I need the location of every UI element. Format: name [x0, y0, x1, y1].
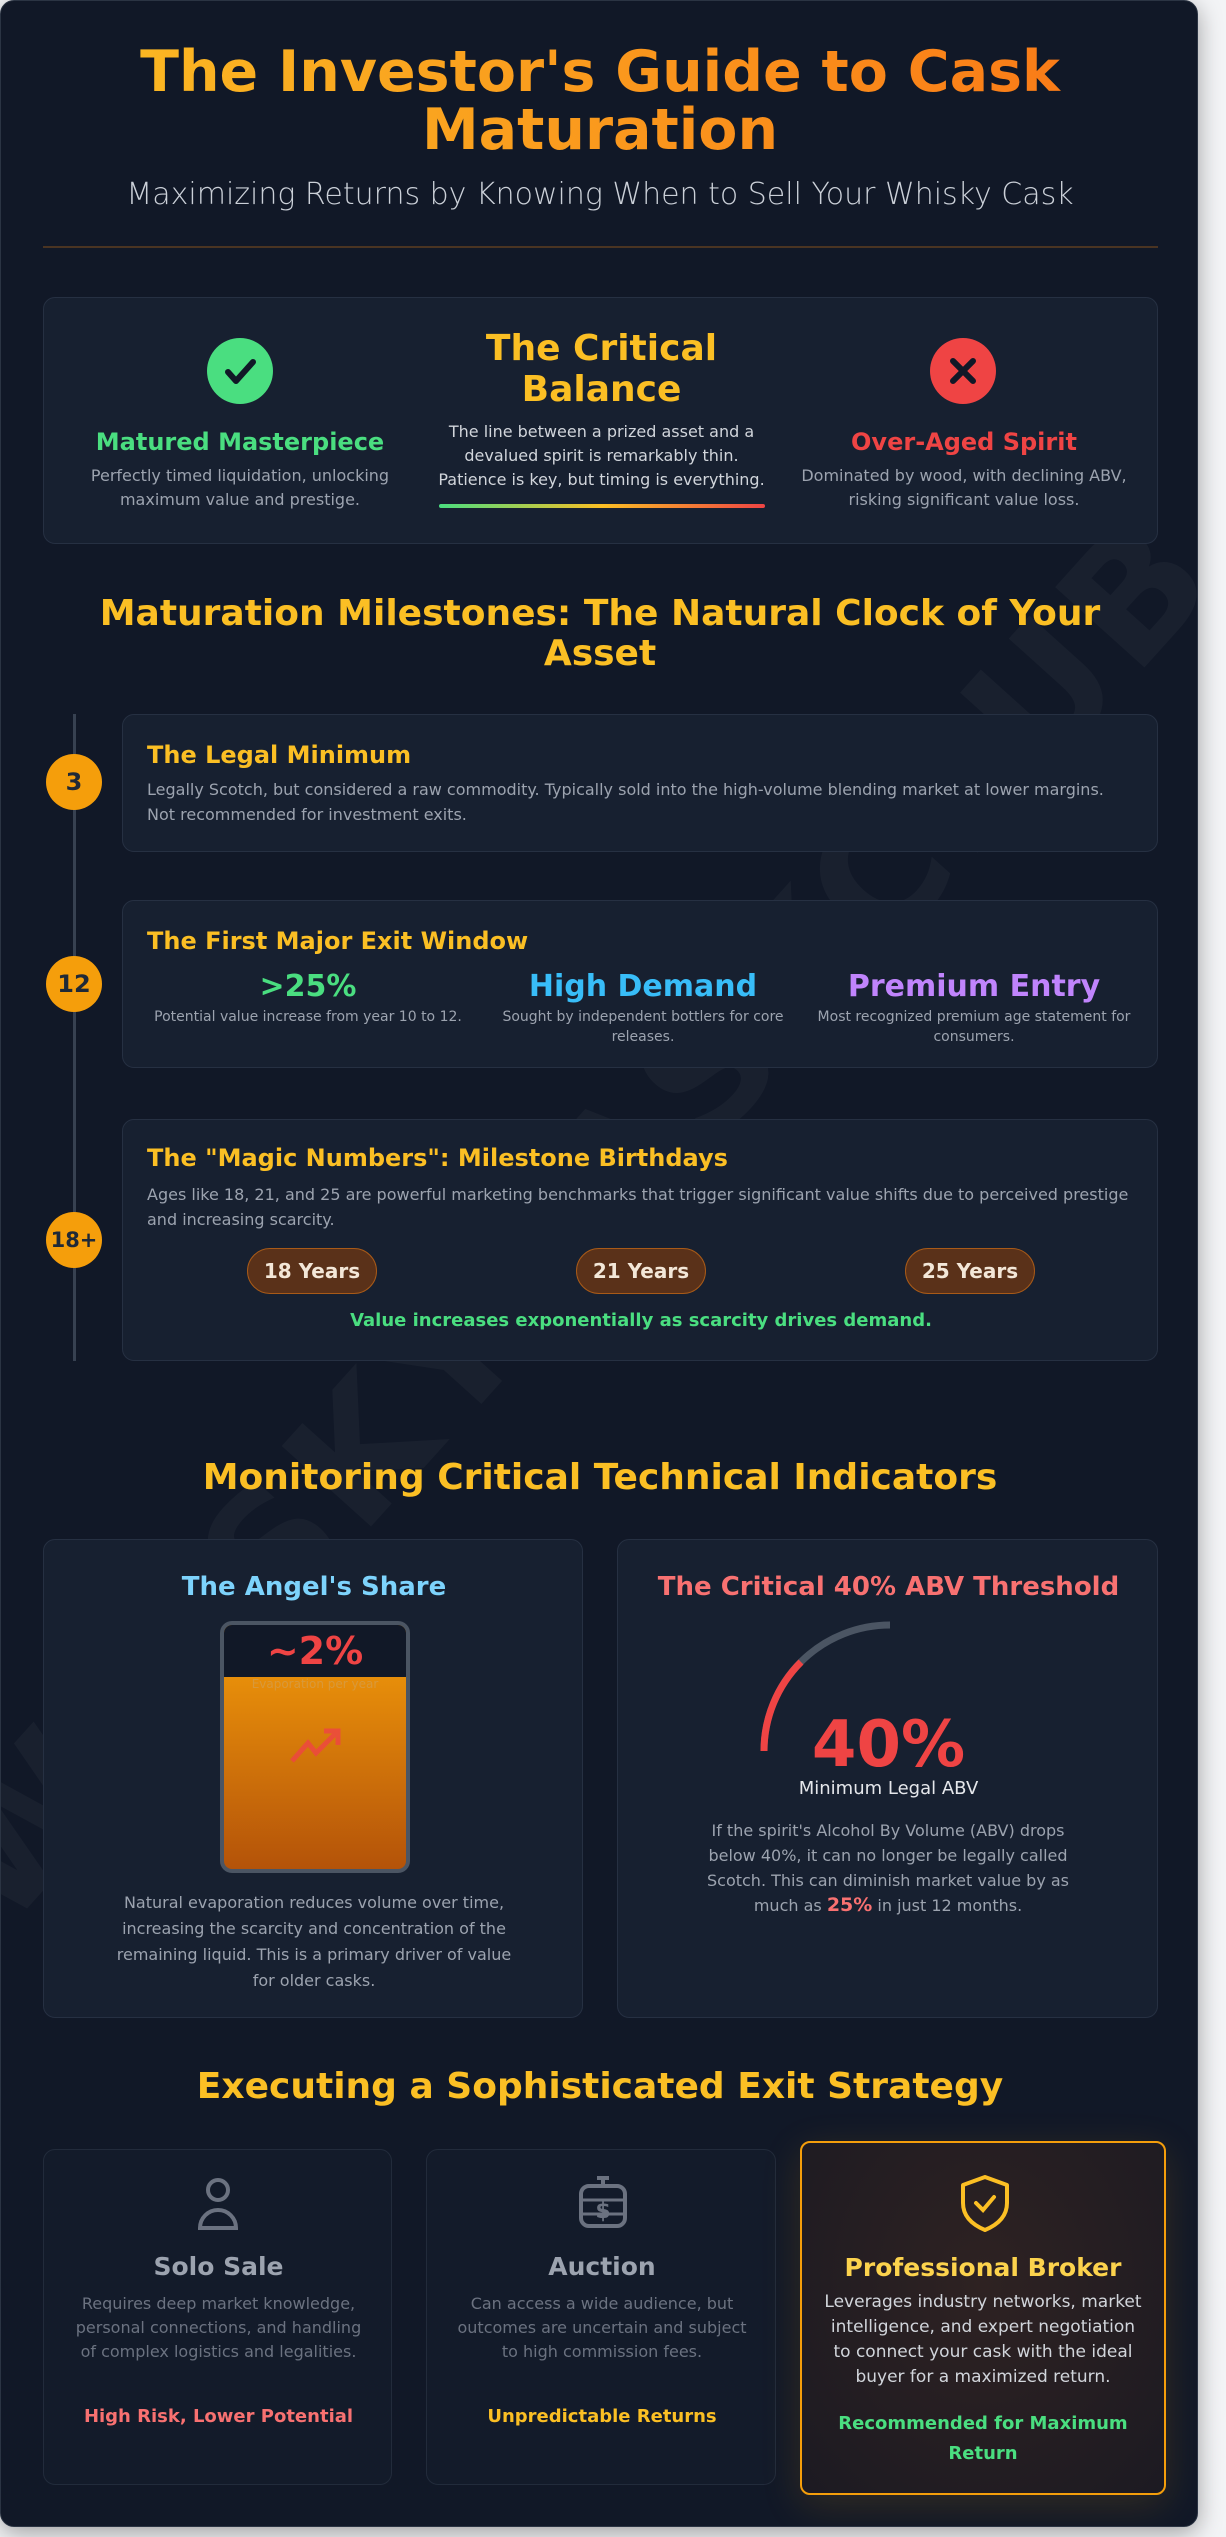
pill: 21: 21 Years: [593, 1259, 689, 1283]
milestone 12: 12: [57, 970, 91, 998]
milestone 3: 3: [66, 768, 82, 796]
card: professional broker: [800, 2141, 1166, 2495]
text: the critical balance: Patience is key, but timing is everything.: [438, 470, 765, 489]
chart: abv arc: [760, 1622, 890, 1751]
stat: 25%: >25%: [260, 969, 356, 1004]
text: matured masterpiece: maximum value and prestige.: [120, 490, 360, 509]
title: The Investor's Guide to Cask: [140, 39, 1060, 105]
card: solo sale: High Risk, Lower Potential: [84, 2406, 353, 2427]
stat: premium entry: Most recognized premium age statement for: [818, 1009, 1130, 1025]
card: solo sale: [43, 2149, 392, 2485]
stat: premium entry: [818, 969, 1130, 1045]
card: first exit window: The First Major Exit Window: [147, 927, 528, 955]
card: legal minimum: [122, 714, 1158, 852]
icon: shield: [961, 2175, 1009, 2232]
title: Maturation: [422, 97, 778, 163]
text: the critical balance: [438, 328, 765, 508]
icon: check: [207, 338, 273, 404]
pill: 21: [576, 1248, 706, 1294]
card: legal minimum: Not recommended for investment exits.: [147, 805, 467, 824]
text: matured masterpiece: [91, 428, 389, 509]
card: professional broker: Recommended for Maximum Return: [838, 2413, 1128, 2464]
panel: angel's share: The Angel's Share: [182, 1572, 446, 1602]
pill: 25: 25 Years: [922, 1259, 1018, 1283]
card: auction: Auction: [548, 2252, 656, 2281]
milestone 18+: [46, 1212, 102, 1268]
icon: cask gauge: ~2%: [267, 1629, 363, 1673]
stat: 25%: Potential value increase from year 10 to 12.: [154, 1009, 462, 1025]
text: the critical balance: devalued spirit is remarkably thin.: [464, 446, 739, 465]
pill: 25: [905, 1248, 1035, 1294]
subtitle: Maximizing Returns by Knowing When to Sell Your Whisky Cask: [126, 177, 1074, 212]
stat: premium entry: consumers.: [933, 1029, 1015, 1045]
card: magic numbers: Ages like 18, 21, and 25 are powerful marketing benchmarks that trigger significant value shifts due to perceived prestige and increasing scarcity.: [147, 1185, 1128, 1229]
stat: high demand: Sought by independent bottlers for core: [502, 1009, 784, 1025]
milestone 12: [46, 956, 102, 1012]
icon: person: [198, 2178, 238, 2230]
text: the critical balance: The line between a prized asset and a: [449, 422, 754, 441]
card: auction: Can access a wide audience, but outcomes are uncertain and subject to high commission fees.: [457, 2294, 747, 2361]
card: legal minimum: Legally Scotch, but considered a raw commodity. Typically sold into the high-volume blending market at lower margins.: [147, 780, 1104, 799]
panel: critical balance: [43, 297, 1158, 544]
icon: money: [579, 2176, 627, 2228]
pill: 18: 18 Years: [264, 1259, 360, 1283]
text: the critical balance: Balance: [522, 369, 681, 410]
card: solo sale: Requires deep market knowledge, personal connections, and handling of complex logistics and legalities.: [76, 2294, 361, 2361]
card: professional broker: Professional Broker: [845, 2253, 1121, 2282]
icon: cask gauge: Evaporation per year: [252, 1677, 378, 1691]
stat: 25%: [154, 969, 462, 1025]
heading: exit strategy: Executing a Sophisticated Exit Strategy: [197, 2066, 1003, 2107]
text: over-aged spirit: [801, 428, 1127, 509]
stat: high demand: High Demand: [529, 969, 757, 1004]
icon: x: [930, 338, 996, 404]
panel: 40% ABV: [617, 1539, 1158, 2018]
card: solo sale: Solo Sale: [153, 2252, 284, 2281]
text: over-aged spirit: Over-Aged Spirit: [851, 428, 1077, 456]
text: the critical balance: The Critical: [486, 328, 717, 369]
panel: 40% ABV: The Critical 40% ABV Threshold: [658, 1572, 1119, 1602]
card: auction: [426, 2149, 776, 2485]
panel: angel's share: [43, 1539, 583, 2018]
stat: high demand: [502, 969, 784, 1045]
panel: 40% ABV: Minimum Legal ABV: [799, 1778, 978, 1799]
card: first exit window: [122, 900, 1158, 1068]
title: [1, 43, 1199, 159]
panel: 40% ABV: If the spirit's Alcohol By Volume (ABV) drops below 40%, it can no longer be legally called Scotch. This can diminish market value by as much as 25% in just 12 months.: [707, 1821, 1069, 1916]
text: matured masterpiece: Matured Masterpiece: [96, 428, 384, 456]
stat: high demand: releases.: [612, 1029, 674, 1045]
milestone 18+: 18+: [51, 1228, 97, 1252]
pill: 18: [247, 1248, 377, 1294]
stat: premium entry: Premium Entry: [848, 969, 1100, 1004]
milestone 3: [46, 754, 102, 810]
text: over-aged spirit: risking significant value loss.: [849, 490, 1079, 509]
card: magic numbers: [122, 1119, 1158, 1361]
heading: technical indicators: Monitoring Critical Technical Indicators: [203, 1457, 997, 1498]
timeline: [73, 714, 76, 1361]
heading: maturation milestones: [100, 593, 1100, 674]
callout: exponential: Value increases exponentially as scarcity drives demand.: [350, 1310, 932, 1331]
panel: 40% ABV: 40%: [812, 1708, 965, 1782]
text: over-aged spirit: Dominated by wood, with declining ABV,: [801, 466, 1127, 485]
text: matured masterpiece: Perfectly timed liquidation, unlocking: [91, 466, 389, 485]
heading: maturation milestones: Asset: [544, 633, 656, 674]
card: legal minimum: The Legal Minimum: [147, 741, 411, 769]
icon: money: $: [595, 2199, 611, 2224]
heading: maturation milestones: Maturation Milestones: The Natural Clock of Your: [100, 593, 1100, 634]
card: magic numbers: The "Magic Numbers": Milestone Birthdays: [147, 1144, 728, 1172]
card: professional broker: Leverages industry networks, market intelligence, and expert negotiation to connect your cask with the ideal buyer for a maximized return.: [824, 2292, 1142, 2387]
panel: angel's share: Natural evaporation reduces volume over time, increasing the scarcity and concentration of the remaining liquid. This is a primary driver of value for older casks.: [117, 1893, 511, 1990]
card: auction: Unpredictable Returns: [487, 2406, 717, 2427]
icon: cask gauge: [220, 1621, 410, 1873]
